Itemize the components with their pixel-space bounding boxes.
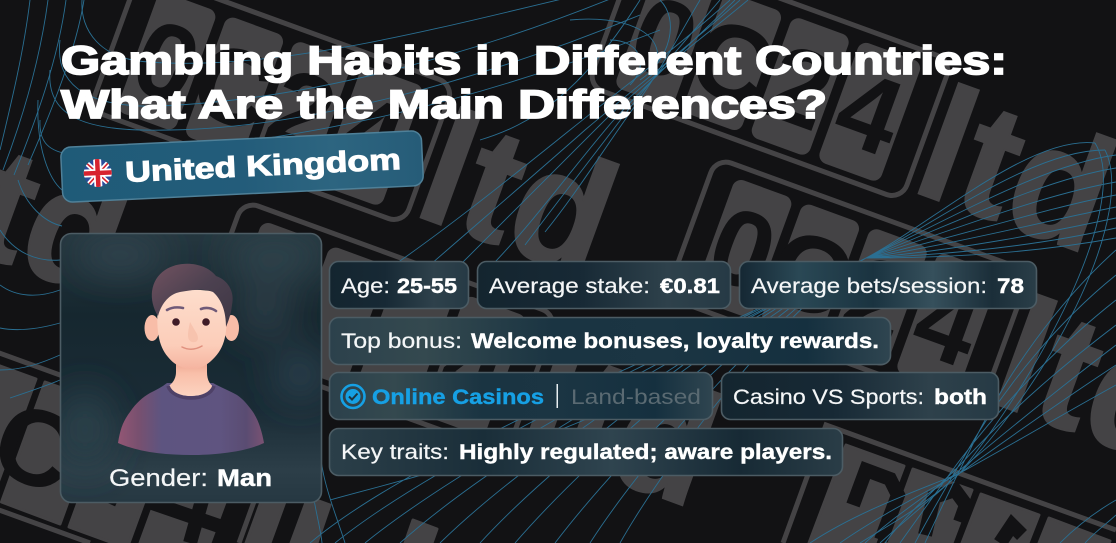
pill: online casinos vs land-based: [330, 372, 712, 420]
background logo pattern: C: [753, 203, 868, 344]
background logo pattern: C: [177, 16, 292, 157]
gender label: Gender:: [109, 465, 208, 492]
background logo pattern: ltd: [398, 77, 639, 312]
pill: average stake: [478, 262, 730, 308]
pill: top bonus: Welcome bonuses, loyalty rewards.: [471, 329, 879, 353]
background logo pattern: 0: [694, 182, 792, 316]
brows: [167, 307, 216, 311]
badge label: United Kingdom: [124, 144, 402, 189]
pill: average stake: Average stake:: [489, 274, 650, 298]
ears: [144, 315, 160, 341]
pill: key traits: Key traits:: [341, 440, 449, 464]
eyes: [172, 318, 180, 326]
background logo pattern: 2: [253, 44, 351, 178]
mouth: [182, 346, 202, 349]
pill: age: [330, 262, 468, 308]
background logo pattern: 4: [323, 69, 420, 203]
pill: top bonus: [330, 318, 890, 364]
pill: casino vs sports: [722, 372, 998, 420]
pill: key traits: [330, 428, 842, 476]
pill: age: Age:: [341, 274, 390, 298]
panel: avatar: [55, 233, 325, 502]
title: Gambling Habits in Different Countries:: [61, 39, 1007, 83]
pill: average bets per session: 78: [997, 274, 1024, 298]
neck: [167, 358, 214, 396]
gender label: Man: [217, 465, 272, 492]
background logo pattern: 2: [751, 20, 849, 154]
title: [61, 39, 1007, 127]
pill: average bets per session: Average bets/session:: [751, 274, 987, 298]
background logo pattern: 2: [829, 231, 927, 365]
pill: age: 25-55: [397, 274, 457, 298]
shirt: [118, 383, 264, 455]
background logo pattern: 4: [899, 256, 996, 390]
background logo pattern: 4: [821, 45, 918, 179]
title: What Are the Main Differences?: [61, 83, 827, 127]
country badge: United Kingdom: [60, 131, 424, 202]
pill: online casinos vs land-based: Online Casinos: [372, 385, 544, 409]
hair: [152, 264, 233, 327]
background logo pattern: ltd: [501, 307, 742, 542]
pill: casino vs sports: Casino VS Sports:: [733, 385, 924, 409]
nose: [188, 322, 198, 342]
pill: average stake: €0.81: [660, 274, 720, 298]
head: [157, 290, 227, 369]
icon: check badge: [342, 385, 364, 408]
background logo pattern: 4: [426, 299, 523, 433]
avatar illustration: [118, 264, 264, 455]
icon: UK flag: [84, 159, 112, 187]
pill: top bonus: Top bonus:: [341, 329, 462, 353]
pill: average bets per session: [740, 262, 1036, 308]
collar: [168, 386, 214, 398]
pill: casino vs sports: both: [934, 385, 987, 409]
pill: key traits: Highly regulated; aware players.: [459, 440, 832, 464]
pill: online casinos vs land-based: Land-based: [571, 385, 701, 409]
